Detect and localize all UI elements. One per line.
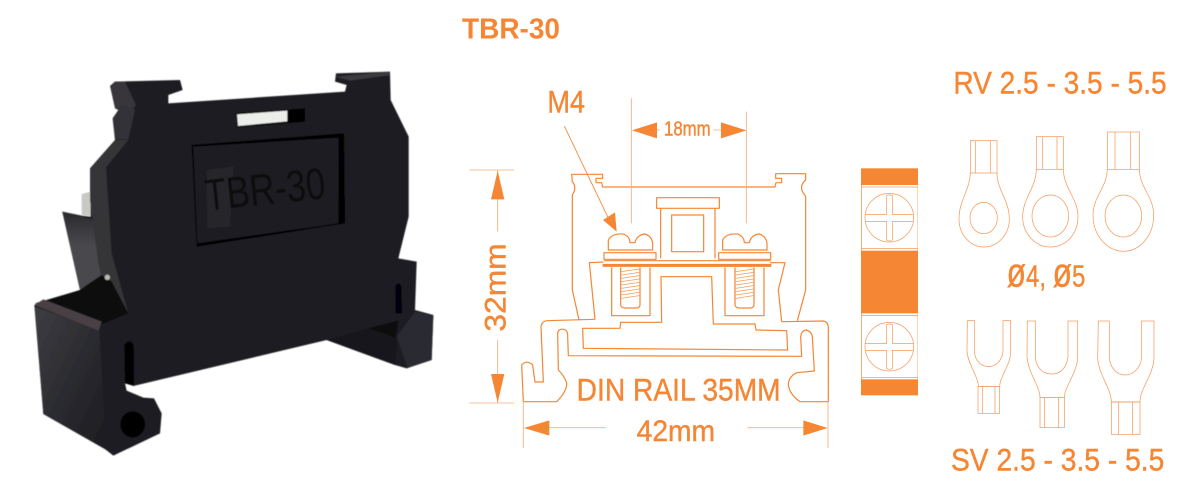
- left side wedge: [62, 212, 115, 290]
- spade terminal small: [967, 321, 1011, 413]
- left block rim: [34, 299, 102, 331]
- spade terminal medium: [1027, 321, 1078, 428]
- DIN rail foot outline: [522, 319, 828, 402]
- window slot: [236, 108, 305, 127]
- spade terminal large: [1098, 321, 1154, 434]
- ring terminal medium: [1023, 137, 1078, 247]
- recessed label panel: TBR-30: [203, 159, 328, 221]
- full silhouette: [34, 72, 433, 456]
- hole diameter label: ø4, ø5: [1007, 249, 1085, 295]
- screw top 1: [865, 193, 914, 242]
- M4 label: M4: [547, 83, 585, 119]
- 32mm dimension: 32mm: [480, 243, 513, 332]
- upper hook highlights: [110, 82, 136, 115]
- M4 pointer arrow: [564, 126, 617, 232]
- top view strip: [861, 168, 918, 395]
- left screw: [604, 234, 656, 316]
- product photo: black terminal block: [34, 72, 433, 456]
- 18mm dimension: 18mm: [664, 118, 711, 140]
- top of left block: [35, 275, 128, 325]
- RV heading: RV 2.5 - 3.5 - 5.5: [953, 64, 1167, 100]
- 42mm dimension: 42mm: [637, 415, 715, 448]
- 42mm dimension: [523, 402, 828, 448]
- inner T section: [583, 277, 788, 350]
- right slot: [395, 283, 402, 313]
- dimension drawing: [469, 83, 828, 448]
- left block front face: [35, 307, 106, 449]
- 32mm dimension: [469, 170, 514, 403]
- left slot: [124, 342, 134, 385]
- centre cap: [657, 198, 719, 258]
- recessed label panel: [192, 133, 345, 247]
- 18mm dimension: [631, 98, 746, 223]
- ring terminal large: [1093, 132, 1154, 251]
- foot hole: [120, 411, 145, 437]
- ring terminal small: [959, 141, 1009, 247]
- housing outline: [572, 174, 806, 322]
- DIN rail label: DIN RAIL 35MM: [577, 372, 781, 408]
- title: TBR-30: [462, 14, 560, 46]
- side strip: [90, 140, 128, 313]
- bus bar: [603, 261, 771, 270]
- SV heading: SV 2.5 - 3.5 - 5.5: [951, 442, 1164, 478]
- right screw: [719, 234, 771, 316]
- screw head: [82, 191, 95, 217]
- screw top 2: [865, 322, 914, 371]
- top view strip and terminals: [861, 64, 1167, 478]
- highlight pin: [105, 275, 110, 280]
- right foot: [327, 312, 433, 368]
